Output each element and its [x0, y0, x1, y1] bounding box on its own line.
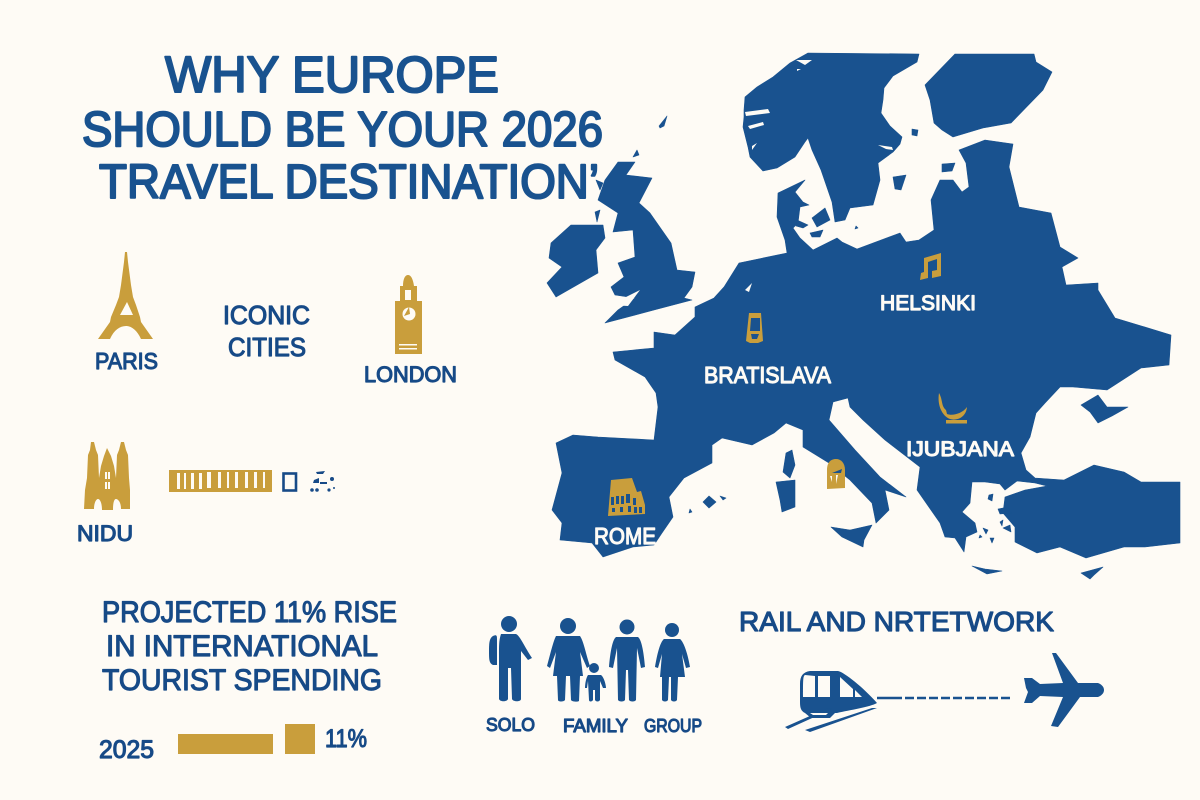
Great Britain: [598, 162, 695, 323]
Aegean isles: [979, 494, 1012, 543]
bar: 2025 baseline: [178, 734, 273, 754]
label: Paris: PARIS: [95, 348, 158, 374]
heading: projected rise: [102, 596, 397, 697]
continental Europe and Turkey: [552, 140, 1180, 558]
icon: child: [585, 663, 606, 702]
Baltic islands and small isles: [595, 116, 955, 229]
title: WHY EUROPE: [165, 46, 499, 103]
heading: iconic cities: CITIES: [228, 332, 306, 362]
city label: Bratislava: BRATISLAVA: [704, 362, 832, 388]
Sardinia: [776, 480, 795, 512]
heading: projected rise: IN INTERNATIONAL: [106, 630, 378, 663]
Finland: [925, 54, 1052, 137]
icon: Big Ben tower: [395, 275, 422, 354]
city label: Helsinki: HELSINKI: [880, 292, 976, 315]
Corsica: [783, 450, 795, 478]
label: 11%: 11%: [325, 725, 367, 753]
icon: small blue frame: [284, 474, 296, 490]
heading: projected rise: PROJECTED 11% RISE: [102, 596, 397, 629]
icon: tower: [746, 313, 763, 343]
heading: projected rise: TOURIST SPENDING: [102, 664, 382, 697]
label: group: GROUP: [644, 716, 702, 736]
panel: tourist spending: [99, 596, 397, 764]
icon: man: [609, 620, 645, 702]
icon: airplane: [1024, 653, 1104, 727]
dashed route line: [877, 697, 1013, 699]
bar: 11% increase: [285, 724, 315, 754]
icon: solo traveller: [489, 616, 532, 701]
map of Europe: [547, 53, 1180, 579]
Ireland: [547, 225, 605, 297]
title: SHOULD BE YOUR 2026: [82, 103, 603, 157]
Scandinavia: [743, 53, 919, 222]
icon: train: [785, 671, 877, 732]
city label: Rome: ROME: [594, 523, 656, 549]
icon: arch monument: [827, 459, 845, 489]
icon: music note: [920, 253, 941, 280]
Crimea: [1081, 395, 1128, 423]
label: London: LONDON: [364, 362, 457, 387]
Balearic islands: [689, 496, 726, 513]
label: Nidu: NIDU: [77, 521, 133, 546]
panel: rail and air network: [739, 606, 1104, 732]
panel: iconic cities: [77, 252, 457, 546]
icon: colosseum: [608, 478, 645, 516]
label: solo: SOLO: [486, 715, 535, 735]
fjords and inlets: [610, 60, 893, 306]
city label: Ljubljana: IJUBJANA: [906, 438, 1014, 461]
label: family: FAMILY: [563, 716, 628, 736]
Crete: [972, 566, 1002, 574]
heading: rail and network: RAIL AND NRTETWORK: [739, 606, 1055, 637]
icon: garbled gold strip: [169, 470, 272, 492]
title: [82, 46, 603, 209]
heading: iconic cities: ICONIC: [223, 300, 310, 330]
Danish islands: [796, 208, 830, 237]
icon: cathedral: [84, 442, 130, 510]
icon: garbled blue marks: [310, 471, 335, 492]
heading: iconic cities: [223, 300, 310, 362]
title: TRAVEL DESTINATION’: [99, 156, 599, 209]
Sicily: [831, 525, 872, 547]
icon: Eiffel Tower: [98, 252, 153, 339]
icon: mother: [547, 618, 590, 702]
Cyprus: [1081, 567, 1103, 579]
map landmass: [547, 53, 1180, 579]
icon: boat sculpture: [939, 393, 967, 424]
panel: traveller types: [486, 616, 702, 736]
icon: woman: [655, 623, 690, 702]
label: 2025: 2025: [99, 736, 154, 764]
